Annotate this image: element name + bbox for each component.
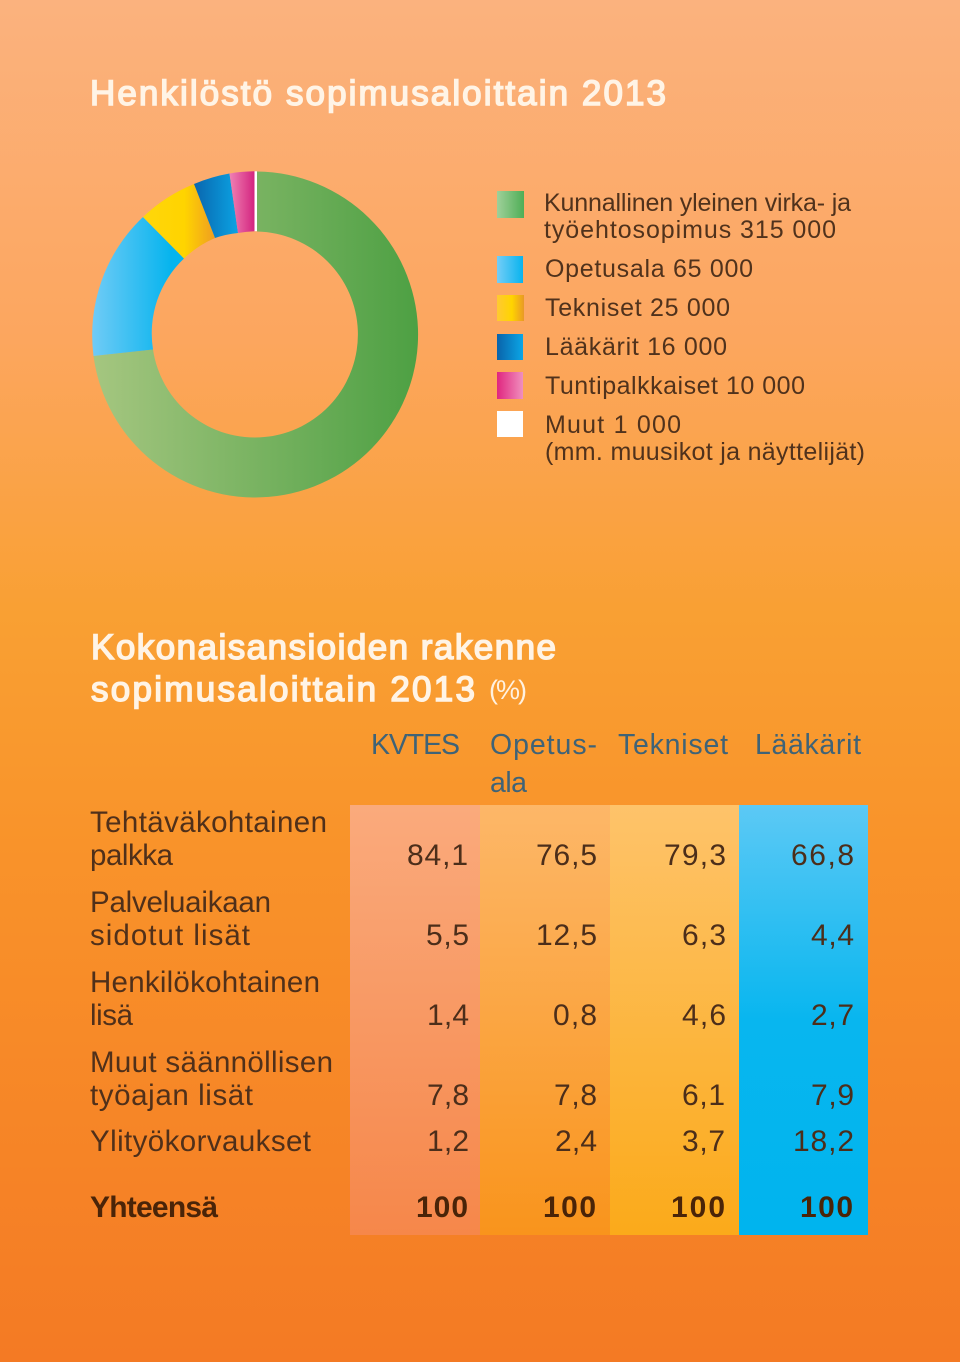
heading: earnings structure: Kokonaisansioiden rakenne [91,628,556,667]
row: personal additions: Henkilökohtainen [90,966,320,999]
row: regular working time additions: 7,8 [554,1079,597,1112]
row: regular working time additions [90,1046,854,1112]
row: regular working time additions: 7,9 [811,1079,854,1112]
table column headers [371,729,861,799]
row: task-specific pay: Tehtäväkohtainen [90,806,327,839]
legend item: doctors: Lääkärit 16 000 [545,333,727,361]
segment: other [254,171,257,231]
table: earnings structure by sector [90,729,868,1235]
row: regular working time additions: 7,8 [427,1079,469,1112]
row: personal additions: 4,6 [682,999,726,1032]
row: service-based additions: 5,5 [426,919,469,952]
row: task-specific pay: 84,1 [407,839,468,872]
legend [497,189,865,466]
row: overtime pay: 3,7 [682,1125,725,1158]
row: personal additions: 0,8 [553,999,597,1032]
row: regular working time additions: työajan lisät [90,1079,253,1112]
row: total: 100 [416,1191,468,1224]
row: personal additions: lisä [90,999,134,1032]
row: total: 100 [543,1191,596,1224]
segment: doctors [194,174,238,238]
legend item: technical: Tekniset 25 000 [545,294,730,322]
legend item: hourly paid: Tuntipalkkaiset 10 000 [545,372,805,400]
row: task-specific pay: 76,5 [536,839,597,872]
row: overtime pay: 18,2 [793,1125,854,1158]
row: service-based additions: 6,3 [682,919,726,952]
table column headers: ala [490,767,527,799]
legend item: KVTES: Kunnallinen yleinen virka- ja [544,189,851,217]
segment: hourly paid [230,171,254,233]
legend item: teaching: Opetusala 65 000 [545,255,753,283]
row: overtime pay: Ylityökorvaukset [90,1125,311,1158]
row: personal additions [90,966,854,1032]
table column headers: Opetus- [490,729,597,761]
row: task-specific pay: palkka [90,839,174,872]
row: service-based additions: sidotut lisät [90,919,250,952]
row: overtime pay [90,1125,854,1158]
table column headers: Lääkärit [755,729,861,761]
row: total: Yhteensä [90,1191,218,1224]
row: total [90,1191,853,1224]
row: service-based additions: 12,5 [536,919,597,952]
row: regular working time additions: Muut säännöllisen [90,1046,333,1079]
row: service-based additions: Palveluaikaan [90,886,271,919]
row: task-specific pay [90,806,854,872]
row: total: 100 [800,1191,853,1224]
donut chart [92,171,418,497]
segment: teaching [92,217,184,356]
row: service-based additions [90,886,854,952]
heading: earnings structure: sopimusaloittain 2013 [91,670,475,709]
row: total: 100 [671,1191,725,1224]
legend item: other: Muut 1 000 [545,411,681,439]
row: regular working time additions: 6,1 [682,1079,725,1112]
row: overtime pay: 2,4 [555,1125,597,1158]
row: service-based additions: 4,4 [811,919,854,952]
heading: earnings structure [91,628,556,709]
row: task-specific pay: 66,8 [791,839,854,872]
title: staff by agreement sector: Henkilöstö sopimusaloittain 2013 [90,74,666,113]
table column headers: Tekniset [618,729,728,761]
segment: technical [143,184,215,258]
table column backgrounds [350,805,868,1235]
row: overtime pay: 1,2 [427,1125,469,1158]
row: personal additions: 2,7 [811,999,854,1032]
legend item: other [497,411,865,466]
legend item: KVTES [497,189,851,244]
row: personal additions: 1,4 [427,999,469,1032]
heading: earnings structure: (%) [489,675,527,705]
segment: KVTES general agreement [94,172,418,497]
legend item: KVTES: työehtosopimus 315 000 [544,216,836,244]
legend item: other: (mm. muusikot ja näyttelijät) [545,438,865,466]
table column headers: KVTES [371,729,460,761]
row: task-specific pay: 79,3 [664,839,726,872]
